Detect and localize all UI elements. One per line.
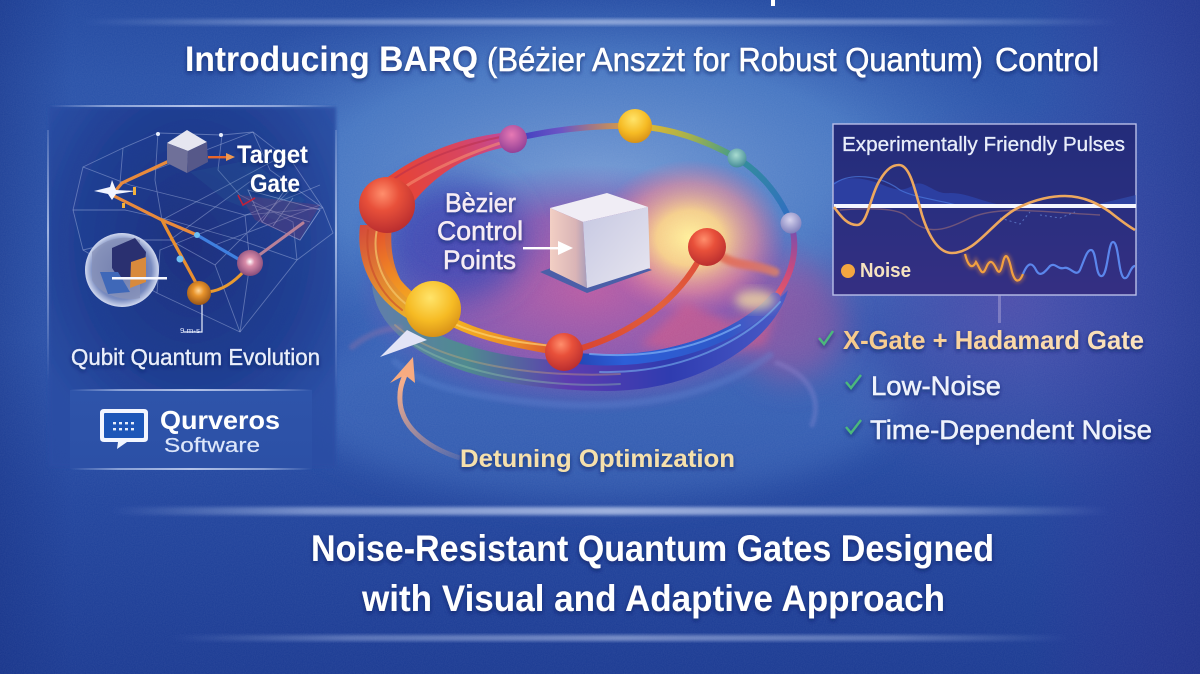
qubit trajectory: [112, 162, 303, 332]
sphere: yellow large: [405, 281, 461, 337]
conclusion heading: with Visual and Adaptive Approach: [361, 578, 945, 619]
check item: x-gate + hadamard gate: X-Gate + Hadamard Gate: [843, 325, 1144, 355]
subtitle: [185, 40, 1099, 79]
arrow: detuning loop: [390, 357, 460, 458]
arrow: label to cube: [523, 241, 573, 255]
detuning optimization label: Detuning Optimization: [460, 445, 735, 473]
arrow: to target gate: [208, 153, 235, 161]
arrow: white pointer on ring: [380, 330, 427, 357]
diagram: bezier ring: [352, 126, 815, 425]
conclusion heading: [311, 528, 994, 619]
swoosh underlayer: [372, 285, 788, 391]
sphere: pink: [499, 125, 527, 153]
panel: qurveros software: [70, 389, 312, 470]
divider: below conclusion: [170, 635, 1070, 641]
check item: time-dependent noise: Time-Dependent Noise: [870, 415, 1152, 445]
sphere: red large: [359, 177, 415, 233]
panel: experimentally friendly pulses: [833, 124, 1136, 295]
chart title: Experimentally Friendly Pulses: [842, 134, 1125, 156]
conclusion heading: Noise-Resistant Quantum Gates Designed: [311, 528, 994, 569]
sphere: lavender: [780, 212, 802, 234]
node: pink qubit state: [237, 250, 263, 276]
target gate label: Gate: [250, 170, 300, 198]
subtitle: Introducing BARQ: [185, 40, 478, 79]
icon: target gate cube: [167, 130, 208, 173]
light flare: [735, 290, 775, 310]
small axis label: 9 m·s: [180, 328, 201, 335]
connector line: [998, 295, 1001, 323]
bezier control points label: Bèzier: [445, 188, 516, 218]
icon: chat window: [100, 409, 148, 449]
noise legend: Noise: [860, 260, 911, 282]
icon: start marker: [94, 180, 136, 208]
top divider: [80, 19, 1120, 25]
node: orange qubit state: [187, 281, 211, 305]
target gate label: [237, 141, 309, 198]
sphere: gold top: [618, 109, 652, 143]
noise trace orange: [965, 254, 1023, 281]
ring strands: [372, 132, 513, 218]
white baseline: [834, 204, 1136, 208]
panel: qubit quantum evolution: [47, 105, 337, 467]
sphere: teal: [728, 148, 746, 168]
clipped title descender: [771, 0, 775, 6]
target gate label: Target: [237, 141, 309, 169]
orange pulse curve: [834, 165, 1135, 253]
bezier control points label: Points: [443, 245, 516, 275]
checklist: [819, 325, 1152, 445]
bezier control points label: [437, 188, 523, 275]
control points: [359, 109, 802, 371]
icon: central gate cube: [540, 193, 652, 293]
check item: low-noise: Low-Noise: [871, 371, 1001, 401]
quantum mesh: [73, 132, 333, 332]
noise legend: [841, 260, 911, 282]
software label: Software: [164, 435, 260, 457]
divider: above conclusion: [110, 507, 1110, 515]
icon: glass qubit sphere: [85, 233, 167, 307]
qurveros wordmark: Qurveros: [160, 405, 280, 435]
sphere: red bottom: [545, 333, 583, 371]
bezier control points label: Control: [437, 216, 523, 246]
subtitle: (Béżier Anszżt for Robust Quantum): [487, 41, 983, 78]
sphere: red right: [688, 228, 726, 266]
panel caption: Qubit Quantum Evolution: [71, 344, 320, 370]
noise trace blue: [1023, 242, 1135, 278]
subtitle: Control: [995, 41, 1099, 78]
pulse chart: [834, 165, 1136, 281]
